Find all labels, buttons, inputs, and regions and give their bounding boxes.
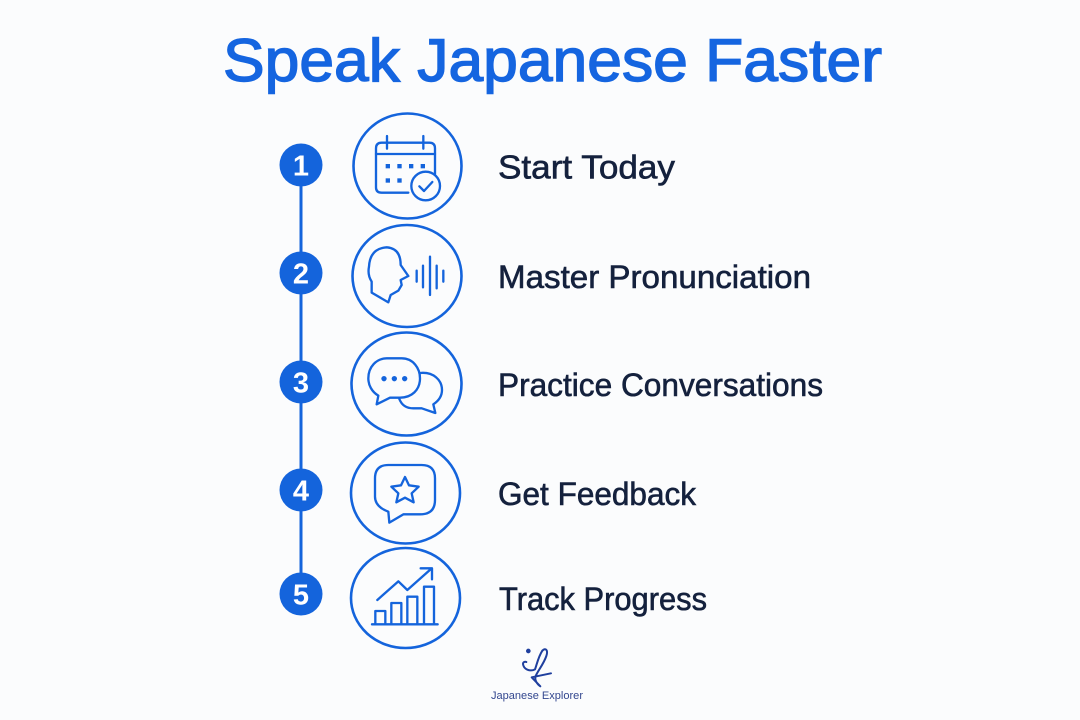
logo: Japanese Explorer: [491, 649, 583, 702]
number badge 4: [280, 468, 322, 512]
number badge 4: 4: [293, 476, 309, 508]
number badge 3: 3: [293, 368, 309, 400]
icon: speech bubble with star: [351, 442, 460, 544]
logo text: Japanese Explorer: [491, 690, 583, 702]
number badge 5: 5: [293, 580, 309, 612]
label: Track Progress: Track Progress: [499, 581, 707, 617]
logo mark: [523, 649, 551, 686]
step 3: [280, 332, 823, 436]
label: Get Feedback: Get Feedback: [498, 476, 697, 512]
step 5: [280, 548, 707, 648]
timeline connector: [300, 165, 302, 594]
icon: conversation bubbles: [352, 332, 462, 436]
icon: rising bar chart: [351, 548, 460, 648]
label: Practice Conversations: Practice Conversations: [498, 367, 823, 403]
step 2: [280, 225, 811, 327]
icon: speaking head with sound wave: [352, 225, 462, 327]
label: Start Today: Start Today: [498, 148, 676, 186]
icon: calendar with check: [354, 114, 462, 218]
number badge 1: 1: [293, 150, 309, 182]
step 4: [280, 442, 697, 544]
number badge 1: [280, 144, 322, 186]
title: Speak Japanese Faster: [223, 27, 882, 94]
label: Master Pronunciation: Master Pronunciation: [498, 259, 811, 295]
step 1: [280, 114, 676, 218]
number badge 2: [280, 252, 322, 294]
number badge 3: [280, 360, 322, 404]
number badge 2: 2: [293, 258, 309, 290]
number badge 5: [280, 572, 322, 616]
